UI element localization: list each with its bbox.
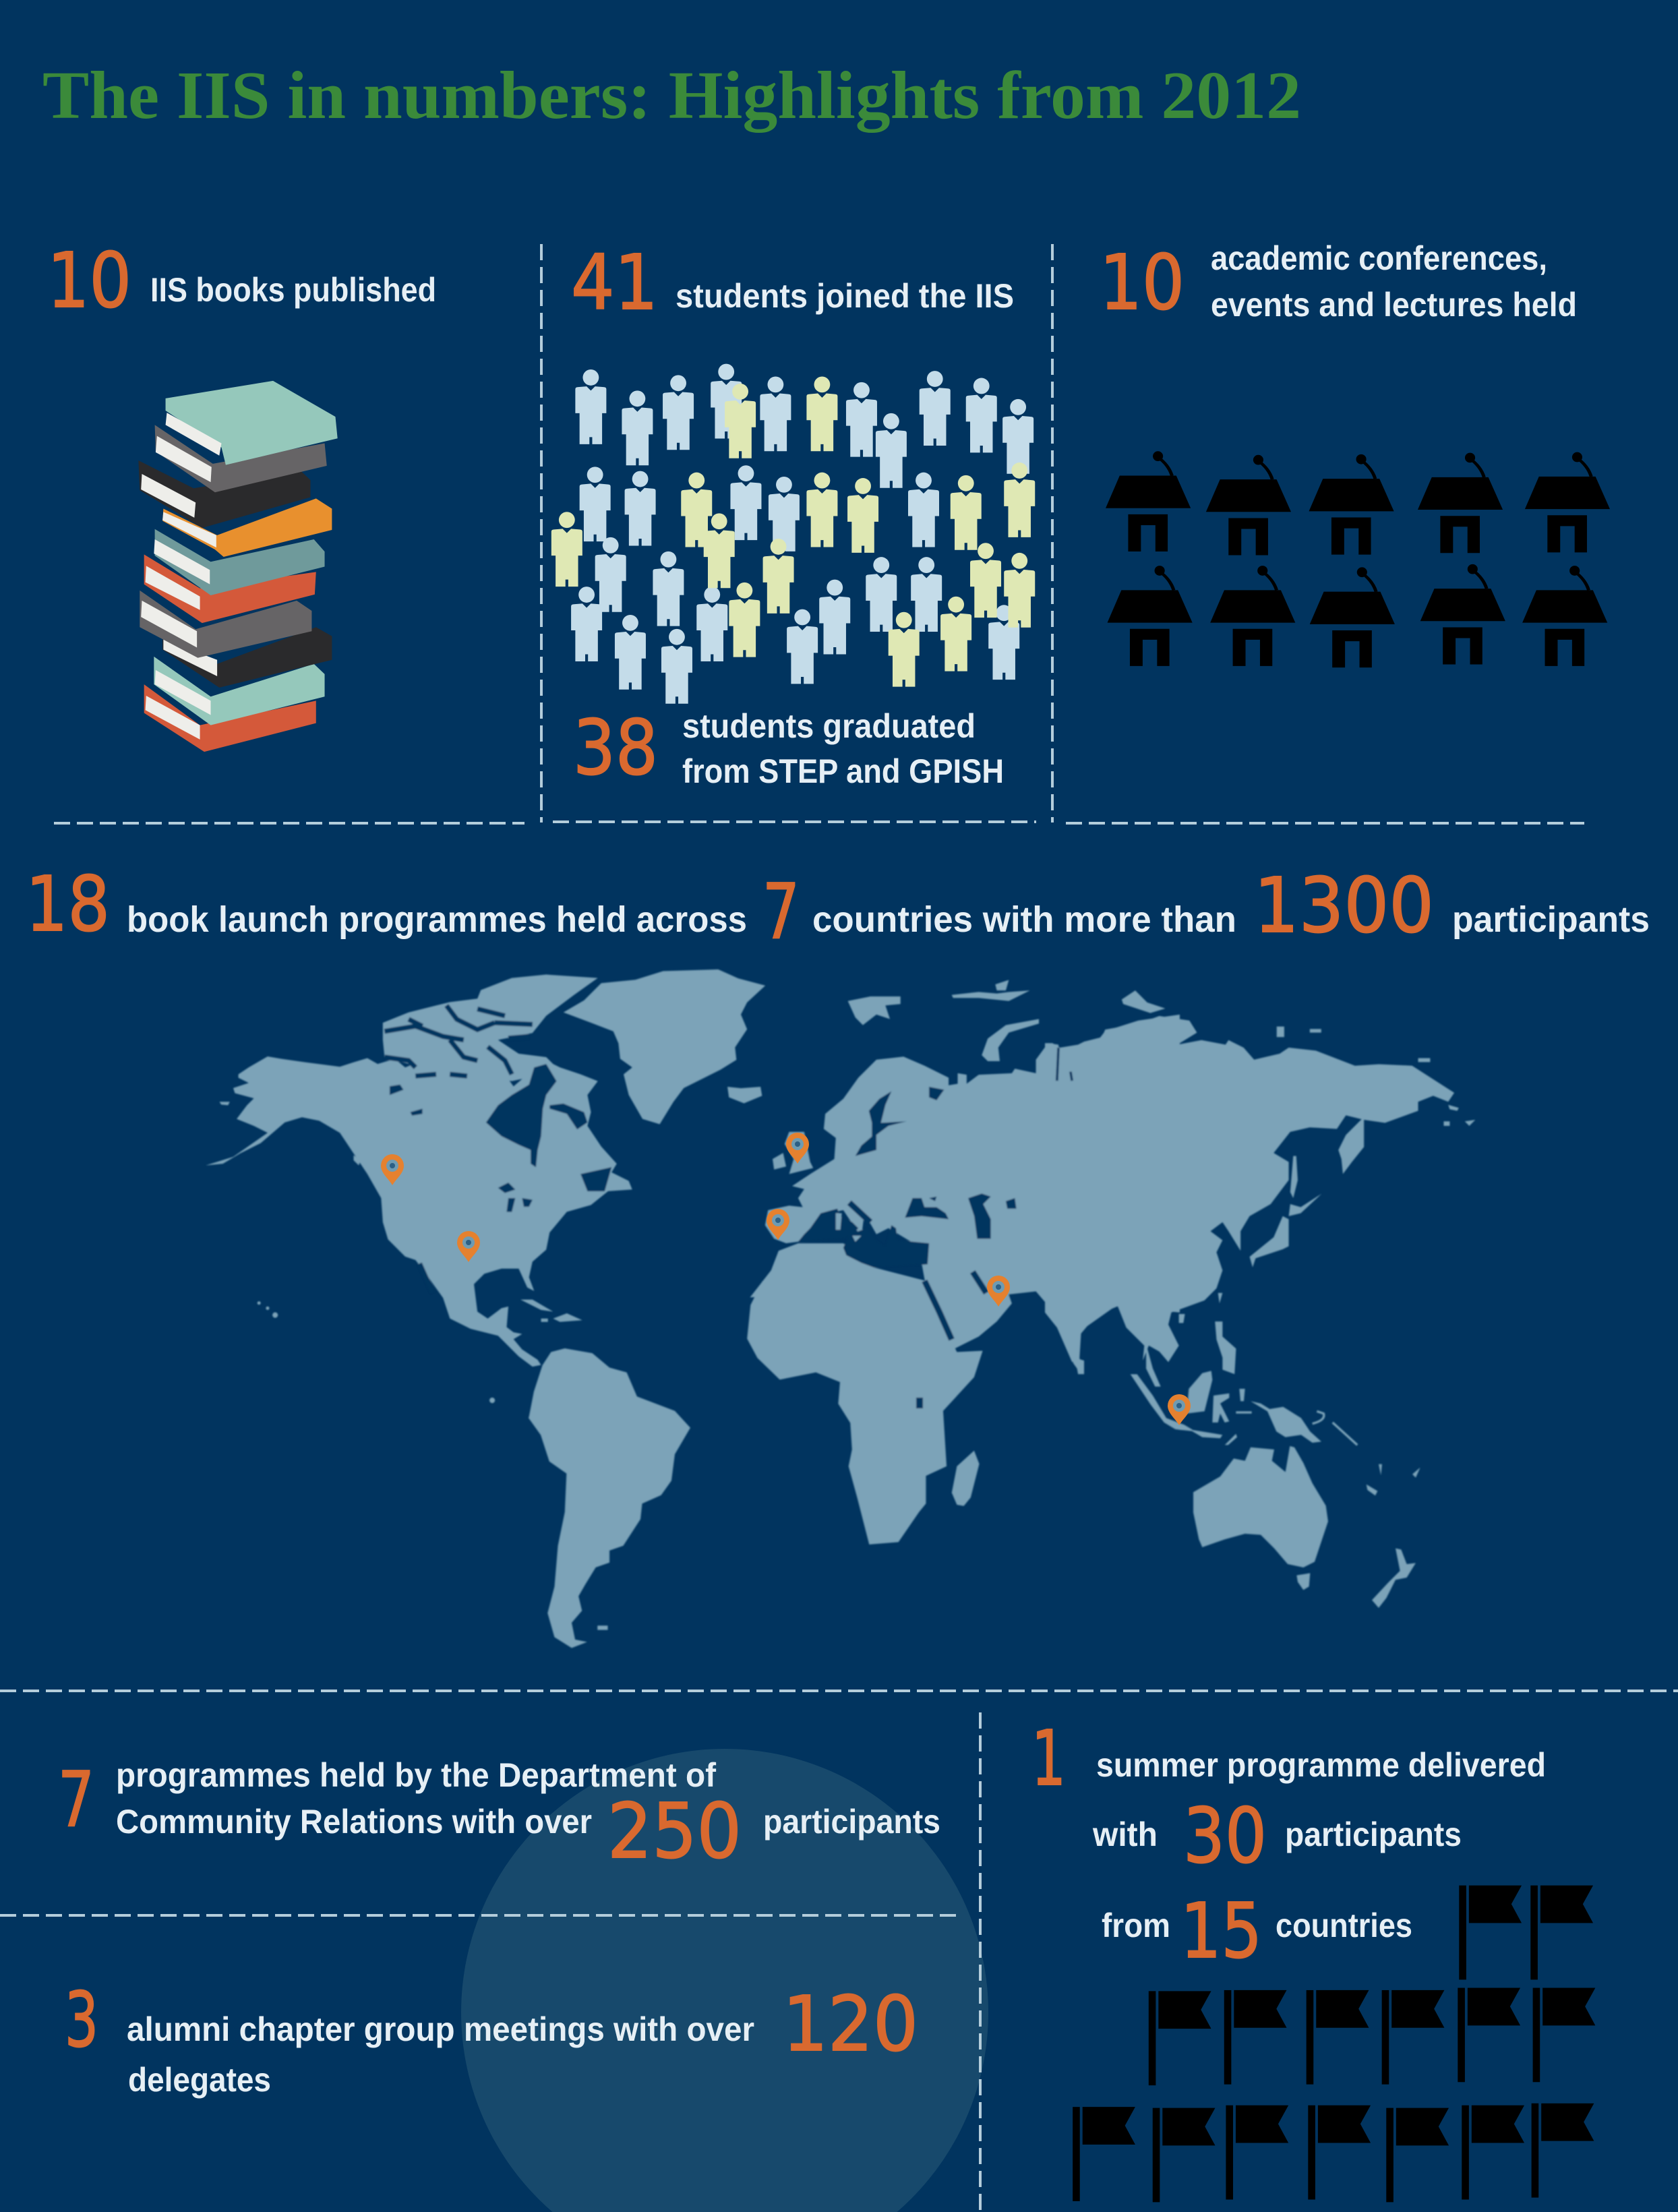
stat: alumni meetings: 120 [783,1981,918,2068]
heading: book launch programmes: book launch programmes held across [127,899,747,940]
stat: community programmes: 250 [607,1788,742,1876]
stat: summer programme: countries [1276,1907,1412,1944]
stat: conferences: events and lectures held [1211,286,1577,324]
horizontal divider right [1066,822,1584,825]
map: Eurasia west and north Africa [727,980,1180,1374]
map: Lake Victoria [916,1398,923,1408]
vertical divider left [540,244,543,823]
horizontal divider full width [0,1690,1678,1692]
stat: community programmes: programmes held by the Department of [116,1756,716,1794]
stat: books published: 10 [47,237,131,325]
stat: alumni meetings: 3 [65,1977,98,2064]
stat: community programmes: 7 [58,1756,94,1844]
stat: students graduated [573,705,1004,792]
stat: summer programme: summer programme delivered [1096,1746,1546,1784]
heading: book launch programmes: 7 [762,868,800,956]
stat: summer programme: 30 [1183,1793,1267,1880]
heading: book launch programmes: participants [1452,899,1650,940]
stat: summer programme: 1 [1031,1715,1066,1803]
stat: community programmes [58,1756,940,1876]
stat: summer programme: 15 [1180,1888,1262,1975]
heading: book launch programmes: countries with more than [812,899,1236,940]
title: The IIS in numbers: Highlights from 2012 [42,57,1301,133]
stat: conferences: academic conferences, [1211,239,1547,277]
stat: summer programme: participants [1285,1816,1462,1853]
location pins [381,1133,1191,1425]
world map [206,969,1475,1648]
horizontal divider left [54,822,525,825]
vertical divider right [1051,244,1054,823]
stat: students joined [571,239,1014,327]
stat: students graduated: students graduated [682,707,976,745]
icon: lecterns [1106,451,1610,667]
decorative circle behind bottom section [461,1749,988,2212]
stat: books published: IIS books published [150,271,436,309]
icon: flags [1073,1886,1595,2202]
stat: community programmes: participants [763,1803,940,1841]
stat: community programmes: Community Relations with over [116,1803,592,1841]
stat: summer programme: with [1092,1816,1158,1853]
vertical divider bottom [979,1712,982,2212]
map: the Americas north [206,969,765,1403]
stat: students joined: 41 [571,239,658,327]
horizontal divider centre [553,820,1036,823]
stat: conferences: 10 [1100,239,1185,327]
stat: books published [47,237,436,325]
stat: students joined: students joined the IIS [676,277,1014,315]
icon: crowd of students [551,364,1035,704]
stat: summer programme [1031,1715,1546,1975]
stat: summer programme: from [1102,1907,1170,1944]
stat: alumni meetings: alumni chapter group meetings with over [127,2010,754,2048]
stat: alumni meetings [65,1977,918,2099]
map: Canadian seas and lakes [384,1005,611,1292]
horizontal divider bottom left [0,1914,959,1917]
map: Southeast Asia and Oceania [1131,1344,1420,1608]
map: Eurasian seas [798,1048,1072,1340]
map: Eurasia east [1045,990,1475,1375]
heading: book launch programmes: 18 [26,861,110,949]
stat: alumni meetings: delegates [128,2061,271,2099]
map: South America and Africa south [529,1281,983,1648]
stat: conferences [1100,239,1577,327]
heading: book launch programmes: 1300 [1254,862,1434,950]
heading: book launch programmes [26,861,1650,956]
icon: stack of books [138,381,338,752]
stat: students graduated: from STEP and GPISH [682,752,1004,790]
stat: students graduated: 38 [573,705,658,792]
